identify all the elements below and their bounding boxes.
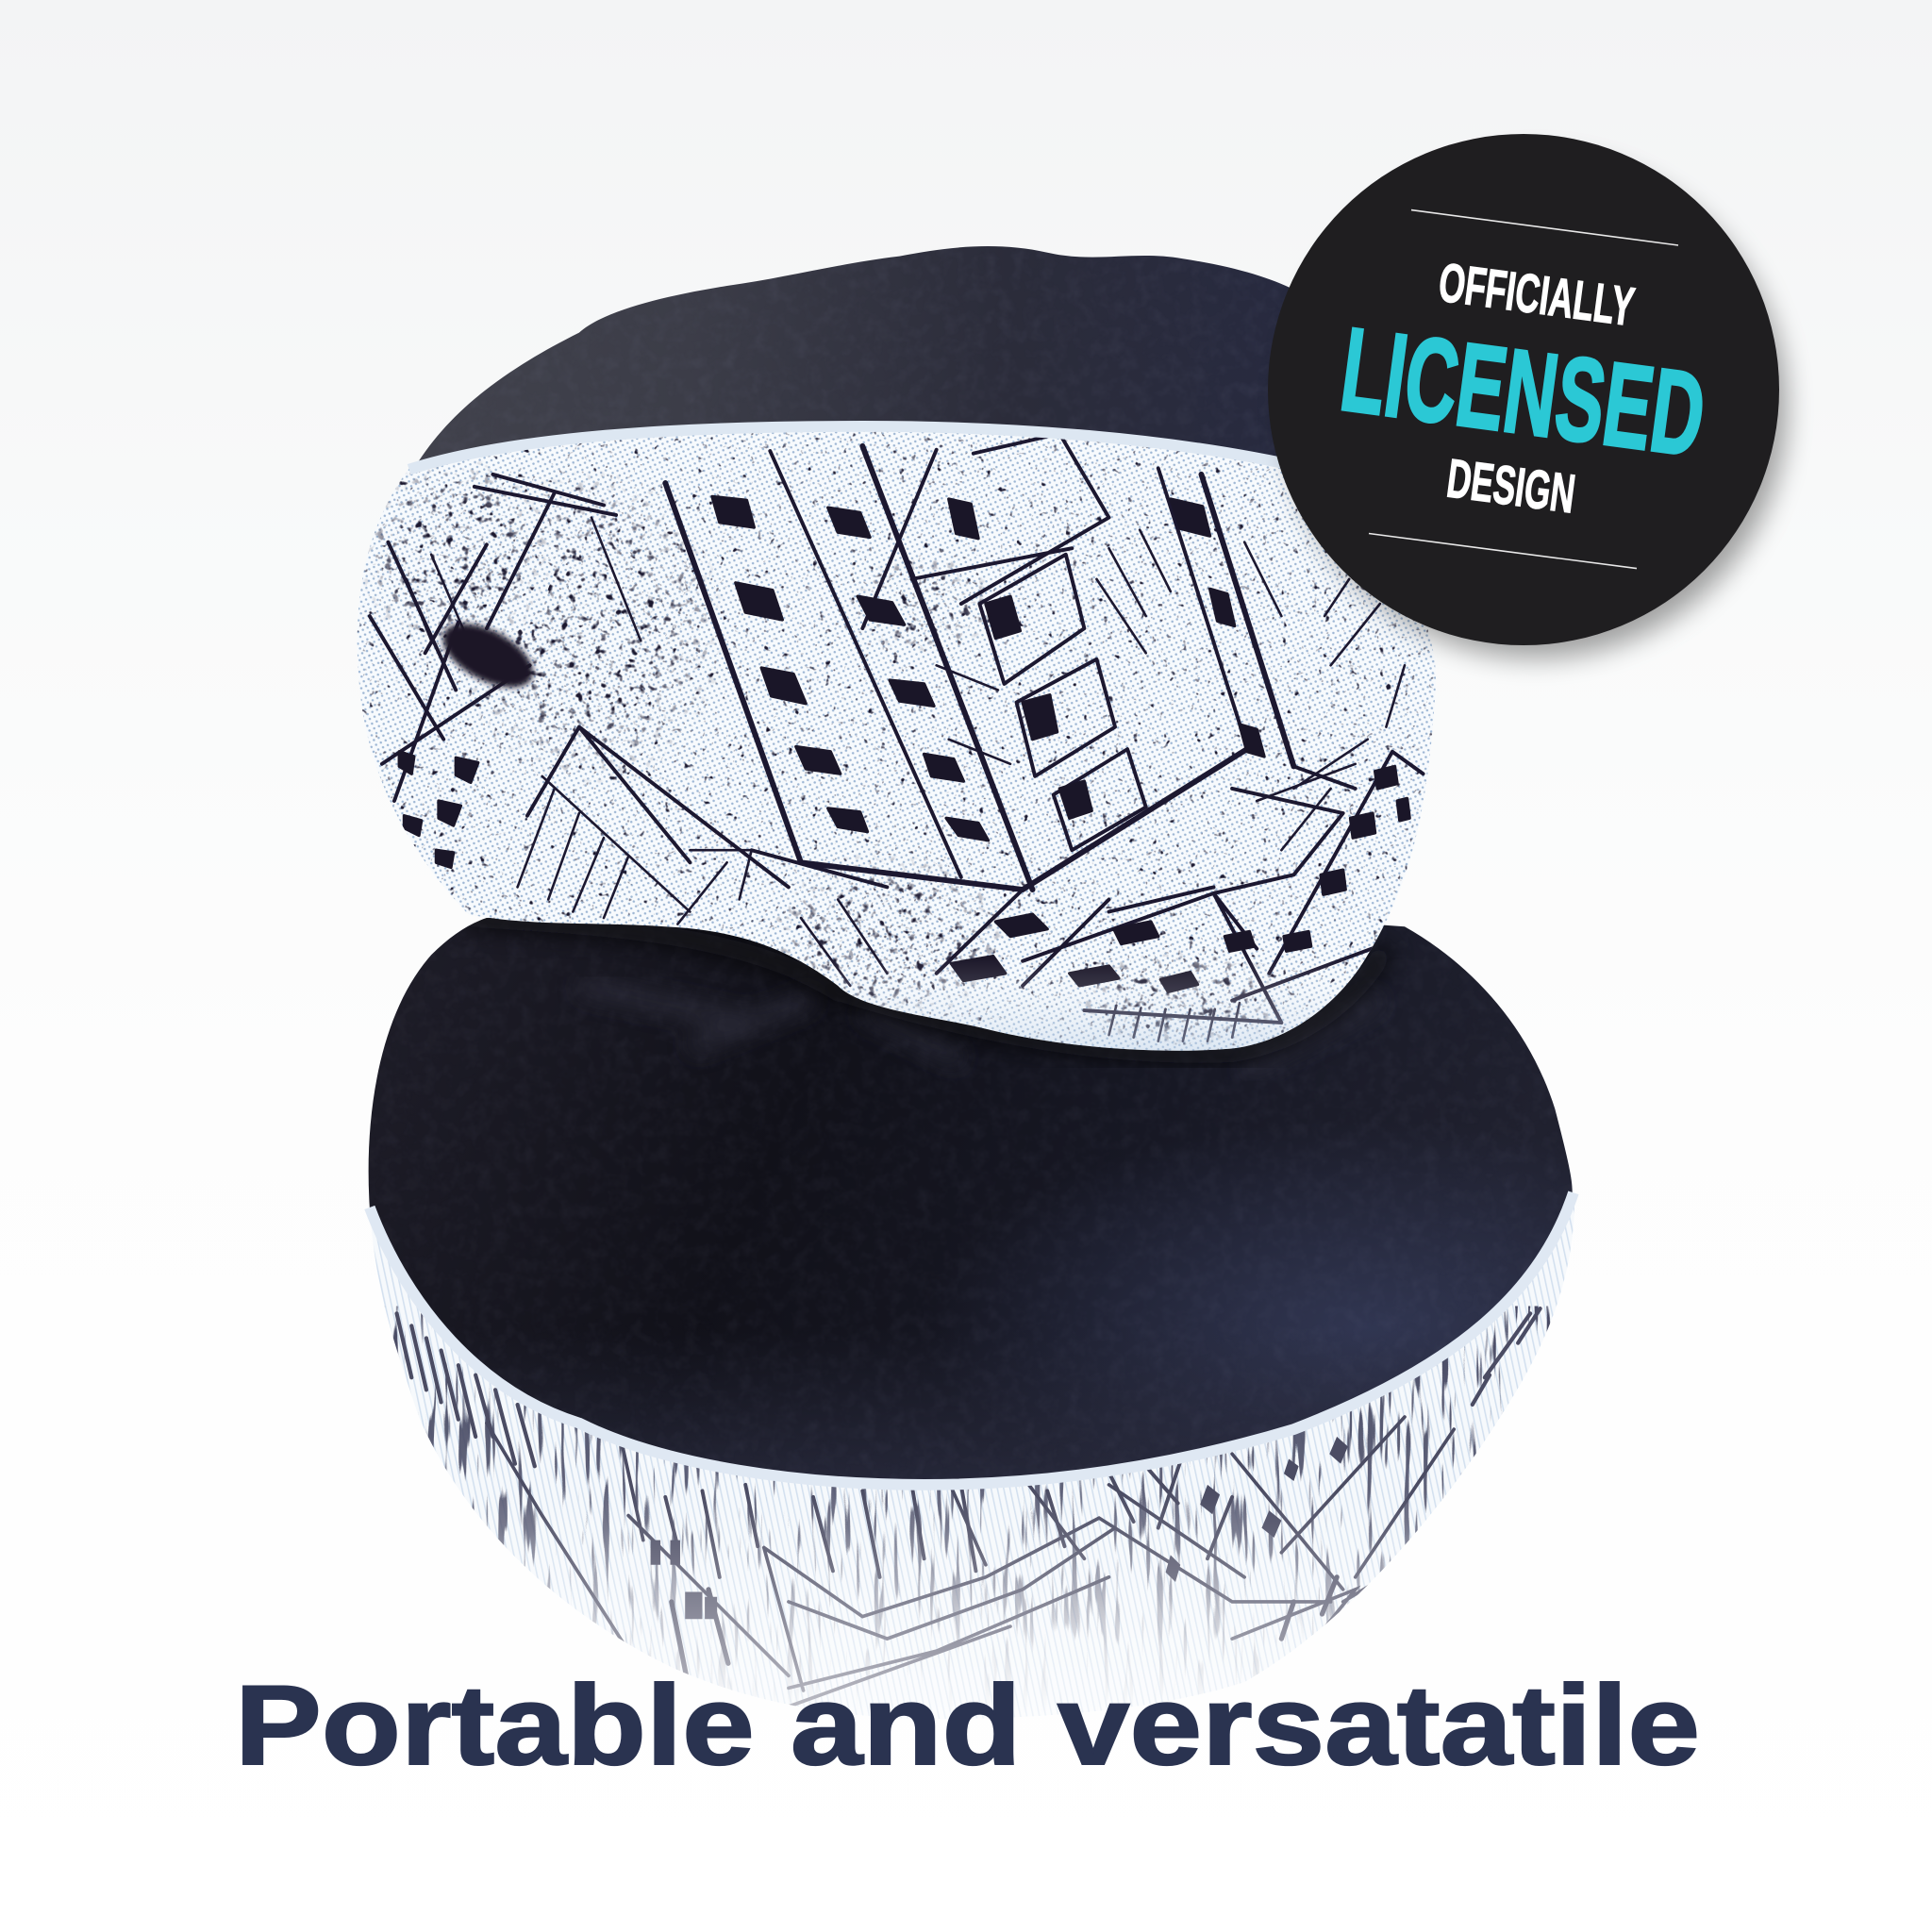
lower cushion velvet top xyxy=(358,909,1590,1491)
title: Portable and versatatile xyxy=(235,1662,1700,1789)
decorative ink speckle xyxy=(351,419,1441,1059)
decorative dark blot xyxy=(438,619,538,692)
badge: officially licensed design xyxy=(1268,134,1787,658)
badge text and rules: DESIGN xyxy=(1443,447,1578,525)
upper cushion piping xyxy=(409,426,1306,470)
badge text and rules: LICENSED xyxy=(1334,302,1712,482)
badge text and rules xyxy=(1334,210,1712,569)
badge disc xyxy=(1268,134,1779,645)
badge shadow xyxy=(1285,157,1787,658)
stacked cushions photo xyxy=(351,241,1590,1738)
badge text and rules: OFFICIALLY xyxy=(1435,252,1638,338)
upper cushion printed side xyxy=(351,419,1441,1059)
lower cushion piping xyxy=(370,1192,1574,1485)
upper cushion xyxy=(351,241,1441,1059)
decorative window marks xyxy=(651,1437,1348,1619)
lower cushion printed side xyxy=(358,1195,1590,1738)
upper cushion velvet top xyxy=(419,246,1290,460)
lower cushion xyxy=(358,909,1590,1738)
